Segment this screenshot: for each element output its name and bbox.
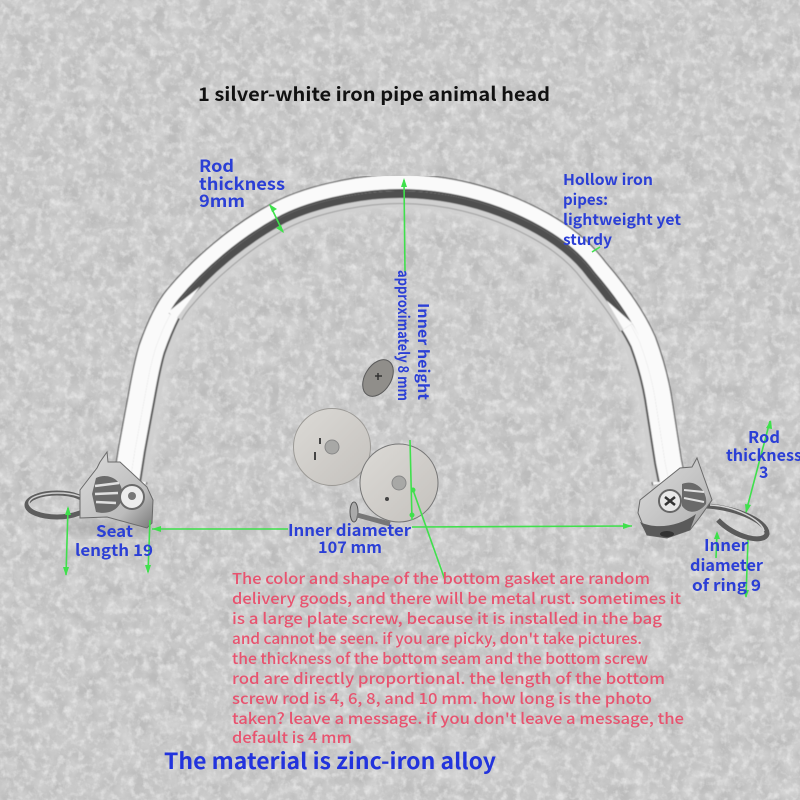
label: right rod thickness 3: 3 — [759, 459, 768, 483]
pink note text block: rod are directly proportional. the length of the bottom — [232, 668, 665, 689]
title: 1 silver-white iron pipe animal head — [198, 80, 550, 107]
inner height arrows — [401, 178, 445, 580]
hollow pipe pointer — [592, 247, 600, 252]
label: hollow iron pipes: pipes: — [563, 189, 608, 210]
inner diameter arrows — [152, 523, 632, 532]
left gasket — [294, 408, 370, 486]
rod thickness arrow — [269, 204, 284, 233]
pink note text block: taken? leave a message. if you don't leave a message, the — [232, 708, 684, 729]
left ring — [27, 493, 87, 517]
label: seat length 19: Seat — [96, 518, 133, 542]
pink note text block: The color and shape of the bottom gasket are random — [232, 568, 650, 589]
right cross screw — [659, 490, 681, 512]
label: rod thickness 9mm: thickness — [199, 170, 285, 195]
pink note text block: screw rod is 4, 6, 8, and 10 mm. how long is the photo — [232, 688, 652, 709]
label: seat length 19: length 19 — [75, 537, 153, 561]
measurement lines — [63, 178, 772, 598]
pink note text block: default is 4 mm — [232, 727, 352, 748]
label: rod thickness 9mm: 9mm — [199, 187, 245, 212]
long screw — [350, 502, 390, 524]
right seat body — [638, 458, 712, 538]
label: inner diameter 107 mm: 107 mm — [318, 534, 382, 558]
right ring — [704, 506, 767, 539]
right rod thickness arrow — [745, 420, 772, 513]
right animal head seat and ring — [638, 458, 767, 539]
seat length arrows — [63, 506, 151, 576]
loose parts: gaskets and screws — [294, 354, 438, 524]
label: hollow iron pipes: Hollow iron — [563, 169, 653, 190]
material statement: The material is zinc-iron alloy — [164, 744, 496, 776]
metal arch handle — [130, 191, 669, 482]
label: hollow iron pipes: lightweight yet — [563, 209, 682, 230]
pink note text block: delivery goods, and there will be metal rust. sometimes it — [232, 588, 681, 609]
label: inner diameter of ring 9: Inner — [704, 532, 748, 556]
small plate screw — [356, 354, 400, 402]
label: inner height approximately 8 mm: Inner height — [413, 303, 434, 401]
label: right rod thickness 3: thickness — [726, 442, 800, 466]
label: inner diameter of ring 9: of ring 9 — [692, 572, 761, 596]
shadow under the handle feet — [65, 519, 165, 537]
pink note text block: and cannot be seen. if you are picky, don't take pictures. — [232, 628, 642, 649]
pink note text block: is a large plate screw, because it is installed in the bag — [232, 608, 662, 629]
label: inner diameter of ring 9: diameter — [690, 552, 763, 576]
label: inner diameter 107 mm: Inner diameter — [288, 517, 411, 541]
label: inner height approximately 8 mm: approximately 8 mm — [393, 270, 414, 401]
right gasket — [360, 444, 438, 522]
label: right rod thickness 3: Rod — [748, 424, 780, 448]
left hex screw — [120, 485, 144, 509]
ring diameter arrows — [714, 531, 749, 598]
label: rod thickness 9mm: Rod — [199, 152, 234, 177]
label: hollow iron pipes: sturdy — [563, 229, 612, 250]
left animal head seat and ring — [27, 452, 153, 528]
pink note text block: the thickness of the bottom seam and the bottom screw — [232, 648, 649, 669]
left seat body — [80, 452, 153, 528]
label: inner height approximately 8 mm — [393, 270, 434, 401]
